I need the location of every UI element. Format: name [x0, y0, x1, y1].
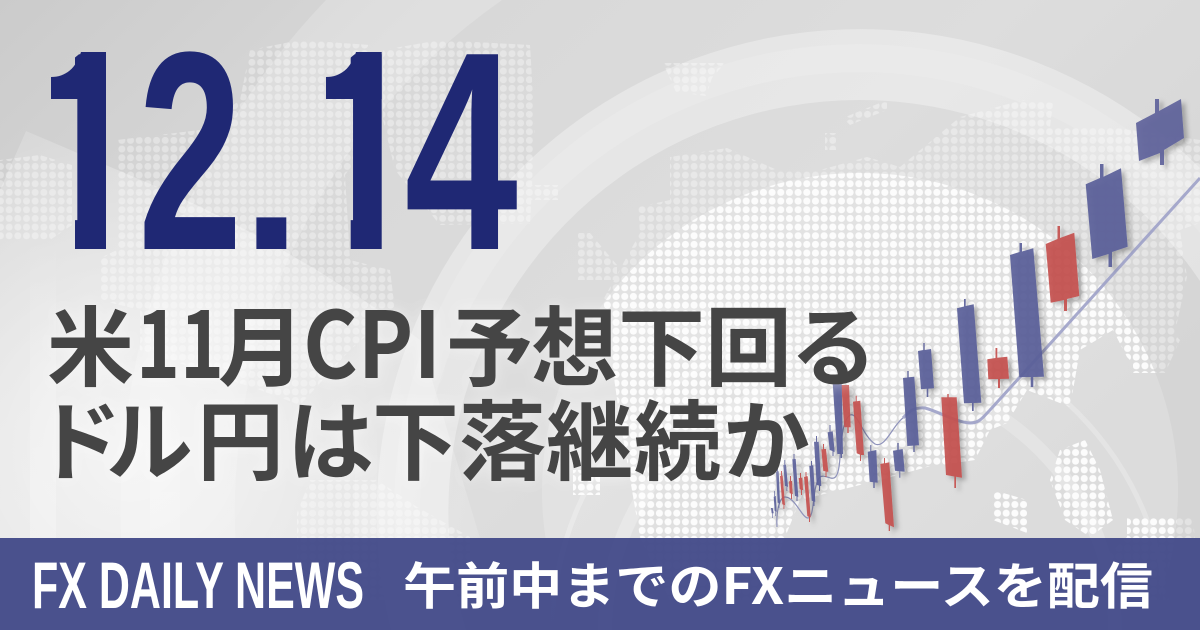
headline line 2: ドル円は下落継続か [35, 373, 810, 499]
candle 2 blue [1086, 164, 1128, 267]
candle 8 blue [918, 343, 934, 397]
candle 6 blue [957, 299, 981, 411]
candle 26 blue [776, 466, 780, 508]
digit 2: 2 [138, 0, 243, 309]
candle 24 blue [783, 460, 788, 491]
digit 1 flag [51, 52, 106, 99]
headline line 1: 米 [47, 279, 134, 405]
candle 23 red [789, 476, 793, 499]
headline line 1: 予想下回る [446, 279, 877, 405]
candle 15 blue [833, 383, 843, 458]
second digit 1: 1 [300, 0, 426, 310]
bottom banner [0, 538, 1200, 630]
candlestick chart [771, 99, 1200, 531]
candle 7 red [941, 394, 962, 488]
date title: 12.14 [51, 51, 517, 249]
period: . [242, 57, 301, 294]
moving average line, thin part [777, 415, 903, 527]
candle 12 blue [868, 445, 878, 488]
candle 3 red [1046, 226, 1079, 311]
candle 19 blue [809, 461, 815, 506]
digit 1: 1 [24, 0, 150, 310]
candle 14 red [841, 385, 851, 433]
candle 28 blue [771, 508, 774, 518]
candle 22 blue [792, 454, 798, 501]
headline line 1: 月 [218, 279, 305, 405]
moving average line, thick part [903, 178, 1200, 423]
background: globe disk [542, 173, 1178, 630]
second digit 1 flag [326, 52, 382, 99]
headline [35, 272, 877, 499]
candle 13 red [853, 396, 864, 461]
candle 9 blue [903, 371, 919, 452]
headline line 1: CPI [303, 272, 441, 405]
candle 16 blue [828, 425, 835, 456]
headline line 1 [47, 272, 877, 405]
background: light area lower left [0, 131, 480, 538]
candle 5 red [987, 348, 1009, 388]
candle 10 blue [893, 443, 905, 478]
candle 11 red [880, 458, 894, 531]
banner tagline: 午前中までのFXニュースを配信 [403, 547, 1153, 619]
banner label: FX DAILY NEWS: FX DAILY NEWS [32, 548, 364, 622]
candle 20 red [804, 472, 811, 522]
headline line 1: 11 [136, 272, 224, 405]
digit 4: 4 [404, 0, 518, 310]
candle 18 blue [814, 436, 821, 491]
candle 17 red [821, 444, 828, 477]
candle 4 blue [1010, 243, 1044, 387]
background: light streaks [30, 230, 377, 538]
candle 21 red [799, 473, 803, 495]
candle 1 blue [1136, 99, 1184, 165]
candle 27 blue [774, 491, 777, 516]
background: dotted world map [0, 42, 1200, 538]
banner bar [0, 538, 1200, 630]
candle 25 red [780, 471, 785, 509]
